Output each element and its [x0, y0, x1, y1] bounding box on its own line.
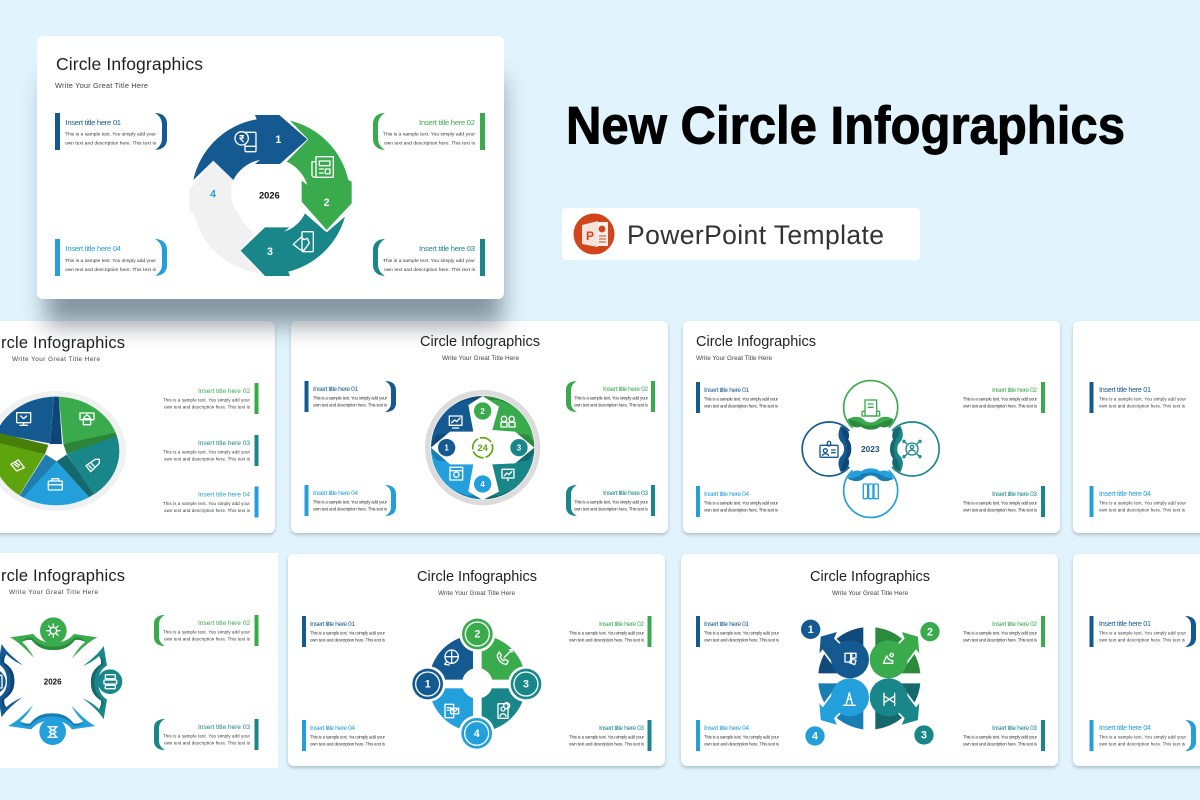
text block 03 — [569, 720, 652, 751]
wing: left — [0, 644, 23, 717]
text block 02 — [569, 616, 652, 647]
text block 03: Insert title here 03 — [419, 244, 475, 253]
text block 04: own text and description here. This text is — [310, 742, 386, 746]
text block 01 — [1090, 382, 1187, 413]
text block 04 — [163, 486, 258, 518]
text block 03 — [963, 486, 1045, 517]
text block 01: Insert title here 01 — [704, 387, 749, 394]
text block 04: own text and description here. This text is — [704, 508, 779, 512]
text block 01: Insert title here 01 — [1099, 619, 1151, 628]
text block 04: This is a sample text. You simply add your — [65, 258, 156, 264]
cycle diagram — [189, 115, 352, 276]
text block 02: own text and description here. This text is — [164, 404, 251, 410]
icon: head puzzle — [445, 650, 458, 665]
text block 01: This is a sample text. You simply add your — [704, 396, 779, 402]
icon: monitor — [17, 413, 31, 425]
text block 03 — [163, 435, 258, 466]
text block 02: Insert title here 02 — [992, 621, 1037, 628]
badge: PowerPoint Template — [562, 208, 920, 260]
panel: four rings slide — [683, 321, 1060, 533]
text block 02: own text and description here. This text is — [164, 636, 251, 642]
badge: left server — [0, 669, 6, 694]
text block 03: This is a sample text. You simply add your — [569, 734, 645, 740]
icon: hand phone — [293, 232, 313, 252]
text block 04: Insert title here 04 — [313, 490, 358, 497]
wing: bottom — [8, 705, 95, 729]
text block 03: Insert title here 03 — [198, 724, 250, 731]
ring: bottom — [844, 468, 898, 517]
text block 01: This is a sample text. You simply add your — [313, 396, 388, 400]
text block 02: Insert title here 02 — [198, 620, 250, 627]
panel: pentagon pie slide — [0, 321, 275, 533]
number 2: 2 — [474, 629, 480, 641]
text block 03: Insert title here 03 — [992, 491, 1037, 498]
text block 03 — [963, 720, 1045, 751]
text block 04: This is a sample text. You simply add your — [313, 500, 388, 504]
number 3: 3 — [523, 679, 529, 691]
center year: 2026 — [44, 678, 62, 687]
text block 04: own text and description here. This text is — [65, 267, 157, 273]
text block 01: This is a sample text. You simply add your — [1099, 630, 1187, 636]
text block 01: Insert title here 01 — [310, 621, 355, 628]
panel: winged ring slide — [0, 553, 278, 768]
quadrant arrow 1 — [818, 627, 869, 678]
text block 03: This is a sample text. You simply add your — [163, 450, 251, 454]
text block 01 — [55, 113, 167, 150]
text block 02: Insert title here 02 — [419, 118, 475, 127]
panel: cropped right slide, bottom row — [1073, 554, 1200, 766]
center year: 2026 — [259, 190, 280, 200]
ring: right — [890, 422, 939, 476]
text block 01: Insert title here 01 — [66, 118, 121, 127]
text block 04: own text and description here. This text is — [704, 742, 780, 746]
text block 01: Insert title here 01 — [704, 621, 749, 628]
text block 02: This is a sample text. You simply add your — [574, 396, 649, 400]
arrow segment 3 — [241, 213, 345, 276]
text block 02 — [566, 381, 655, 412]
subheading: Write Your Great Title Here — [442, 355, 519, 362]
quadrant diagram — [410, 616, 544, 751]
text block 03: This is a sample text. You simply add your — [163, 734, 251, 738]
number 1: 1 — [425, 679, 431, 691]
text block 02: Insert title here 02 — [603, 386, 648, 393]
text block 04: This is a sample text. You simply add your — [163, 501, 251, 506]
text block 04: own text and description here. This text is — [1099, 508, 1186, 512]
number 2: 2 — [324, 197, 330, 209]
text block 01: Insert title here 01 — [1099, 385, 1151, 394]
quadrant arrow 2 — [870, 627, 920, 678]
number 3: 3 — [267, 246, 273, 258]
icon: touch screen — [845, 653, 856, 665]
badge: bottom hourglass — [39, 718, 66, 745]
text block 04: This is a sample text. You simply add your — [704, 734, 780, 740]
text block 01: Insert title here 01 — [313, 386, 358, 393]
text block 03: own text and description here. This text is — [569, 742, 645, 746]
text block 04: This is a sample text. You simply add your — [310, 734, 386, 740]
text block 02 — [163, 383, 258, 414]
text block 04: own text and description here. This text is — [1099, 742, 1186, 746]
text block 02: This is a sample text. You simply add your — [383, 132, 475, 138]
text block 02: This is a sample text. You simply add your — [963, 396, 1038, 402]
arrows diagram — [801, 620, 940, 746]
text block 04 — [55, 239, 167, 276]
subheading: Write Your Great Title Here — [9, 589, 98, 596]
text block 01: own text and description here. This text is — [704, 638, 780, 642]
icon: id card — [820, 441, 838, 457]
text block 04: Insert title here 04 — [66, 244, 121, 253]
text block 02: This is a sample text. You simply add your — [163, 630, 251, 634]
text block 04: This is a sample text. You simply add your — [704, 500, 779, 506]
main title: New Circle Infographics — [566, 96, 1125, 156]
number 1: 1 — [275, 134, 281, 146]
text block 04 — [1090, 486, 1187, 517]
icon: 24 hours: 24 — [477, 443, 489, 453]
subheading: Write Your Great Title Here — [12, 356, 100, 363]
panel: cropped right slide, top row — [1073, 321, 1200, 533]
icon: tag — [86, 459, 99, 472]
text block 04: Insert title here 04 — [1099, 723, 1151, 732]
icon: film — [884, 693, 895, 705]
text block 03: own text and description here. This text is — [963, 742, 1038, 746]
text block 02: This is a sample text. You simply add your — [963, 630, 1038, 636]
text block 02 — [963, 616, 1045, 647]
text block 01 — [302, 616, 386, 647]
text block 02: Insert title here 02 — [198, 388, 250, 395]
text block 01: This is a sample text. You simply add your — [65, 132, 156, 138]
icon: basket — [80, 413, 94, 425]
text block 04: own text and description here. This text is — [164, 508, 251, 513]
wing diagram — [0, 617, 122, 745]
wing: top — [10, 617, 97, 659]
text block 02: Insert title here 02 — [599, 621, 644, 628]
text block 04: This is a sample text. You simply add your — [1099, 734, 1187, 740]
icon: landscape — [883, 653, 893, 663]
icon: notes — [11, 460, 24, 471]
arrow segment 2 — [287, 121, 352, 230]
text block 01: own text and description here. This text is — [313, 402, 388, 408]
heading: Circle Infographics — [56, 54, 203, 74]
text block 03: own text and description here. This text is — [164, 456, 251, 462]
icon: PowerPoint logo: P — [586, 229, 594, 243]
text block 02: own text and description here. This text is — [574, 402, 649, 408]
text block 03: Insert title here 03 — [599, 725, 644, 732]
text block 03: This is a sample text. You simply add your — [383, 258, 475, 264]
text block 01 — [304, 381, 396, 412]
text block 03: own text and description here. This text is — [574, 506, 649, 512]
text block 03 — [154, 719, 258, 750]
icon: PowerPoint logo — [574, 214, 614, 254]
wing: right — [82, 646, 107, 719]
text block 04 — [1090, 720, 1196, 751]
icon: binders — [863, 484, 878, 499]
subheading: Write Your Great Title Here — [438, 590, 515, 597]
text block 03: This is a sample text. You simply add your — [963, 500, 1038, 506]
number 1: 1 — [808, 624, 814, 636]
text block 04 — [304, 485, 396, 516]
text block 04: Insert title here 04 — [704, 725, 749, 732]
text block 04 — [696, 486, 779, 517]
quadrant arrow 4 — [818, 678, 869, 729]
text block 04: own text and description here. This text is — [313, 506, 388, 512]
quadrant arrow 3 — [870, 678, 920, 729]
number 1: 1 — [444, 444, 449, 453]
number 3: 3 — [921, 730, 927, 742]
text block 02: own text and description here. This text is — [963, 638, 1038, 642]
number 4: 4 — [210, 188, 216, 200]
icon: network person — [903, 440, 921, 458]
text block 02 — [373, 113, 485, 150]
icon: building — [862, 400, 880, 416]
text block 02: Insert title here 02 — [992, 387, 1037, 394]
number 4: 4 — [474, 728, 480, 740]
text block 01 — [696, 382, 779, 413]
text block 03 — [566, 485, 655, 516]
arrow segment 4 — [189, 161, 260, 273]
text block 02 — [963, 382, 1045, 413]
center year: 2023 — [861, 444, 880, 454]
number 3: 3 — [517, 444, 522, 453]
text block 03 — [373, 239, 485, 276]
number 4: 4 — [812, 731, 818, 743]
heading: Circle Infographics — [420, 334, 540, 350]
text block 03: This is a sample text. You simply add your — [574, 500, 649, 504]
text block 04: Insert title here 04 — [310, 725, 355, 732]
text block 02 — [154, 615, 258, 646]
text block 01: This is a sample text. You simply add your — [1099, 396, 1187, 402]
heading: Circle Infographics — [696, 334, 816, 350]
icon: profile alert — [498, 703, 510, 718]
number 2: 2 — [480, 407, 485, 416]
ring: left — [802, 422, 851, 476]
text block 03: Insert title here 03 — [198, 440, 250, 447]
text block 02: This is a sample text. You simply add your — [163, 398, 251, 402]
text block 03: Insert title here 03 — [992, 725, 1037, 732]
badge label: PowerPoint Template — [627, 220, 884, 250]
icon: gear page — [450, 467, 463, 480]
arrow segment 1 — [193, 115, 307, 180]
text block 04: Insert title here 04 — [704, 491, 749, 498]
number 4: 4 — [480, 480, 485, 489]
text block 01: own text and description here. This text is — [704, 404, 779, 408]
heading: Circle Infographics — [417, 569, 537, 585]
badge: right server — [98, 669, 122, 694]
text block 01: This is a sample text. You simply add your — [310, 630, 386, 636]
subheading: Write Your Great Title Here — [832, 590, 908, 597]
text block 03: own text and description here. This text is — [164, 740, 251, 746]
icon: briefcase — [48, 479, 62, 490]
text block 04: Insert title here 04 — [1099, 489, 1151, 498]
icon: chart monitor — [449, 416, 462, 428]
panel: main arrow cycle slide — [37, 36, 504, 299]
text block 01 — [1090, 616, 1196, 647]
icon: people — [501, 416, 515, 427]
icon: phone payment — [235, 132, 256, 152]
text block 01: own text and description here. This text is — [310, 638, 386, 642]
text block 01 — [696, 616, 780, 647]
text block 04: This is a sample text. You simply add your — [1099, 500, 1187, 506]
text block 03: This is a sample text. You simply add your — [963, 734, 1038, 740]
text block 02: own text and description here. This text is — [384, 140, 476, 146]
icon: traffic cone — [843, 693, 855, 705]
text block 01: This is a sample text. You simply add your — [704, 630, 780, 636]
text block 01: own text and description here. This text is — [1099, 638, 1186, 642]
pie chart — [0, 391, 126, 511]
heading: Circle Infographics — [810, 569, 930, 585]
text block 01: own text and description here. This text is — [1099, 404, 1186, 408]
number 2: 2 — [927, 626, 933, 638]
ring diagram — [802, 381, 939, 517]
text block 03: own text and description here. This text is — [384, 267, 476, 273]
panel: four arrows slide — [681, 554, 1058, 766]
icon: presentation — [502, 469, 514, 481]
subheading: Write Your Great Title Here — [55, 81, 148, 90]
panel: quadrant circle slide — [288, 554, 665, 766]
text block 04 — [696, 720, 780, 751]
text block 01: own text and description here. This text is — [65, 140, 157, 146]
subheading: Write Your Great Title Here — [696, 355, 772, 362]
text block 02: This is a sample text. You simply add your — [569, 630, 645, 636]
icon: newspaper — [312, 157, 333, 177]
text block 03: own text and description here. This text is — [963, 508, 1038, 512]
panel: cross wheel slide — [291, 321, 668, 533]
text block 03: Insert title here 03 — [603, 490, 648, 497]
text block 02: own text and description here. This text is — [569, 638, 645, 642]
wheel diagram — [425, 390, 540, 505]
ring: top — [844, 381, 898, 430]
text block 04 — [302, 720, 386, 751]
text block 04: Insert title here 04 — [198, 492, 250, 498]
main slide shadow — [46, 80, 502, 325]
icon: phone mail — [445, 704, 459, 718]
icon: phone call — [497, 650, 512, 664]
text block 02: own text and description here. This text is — [963, 404, 1038, 408]
